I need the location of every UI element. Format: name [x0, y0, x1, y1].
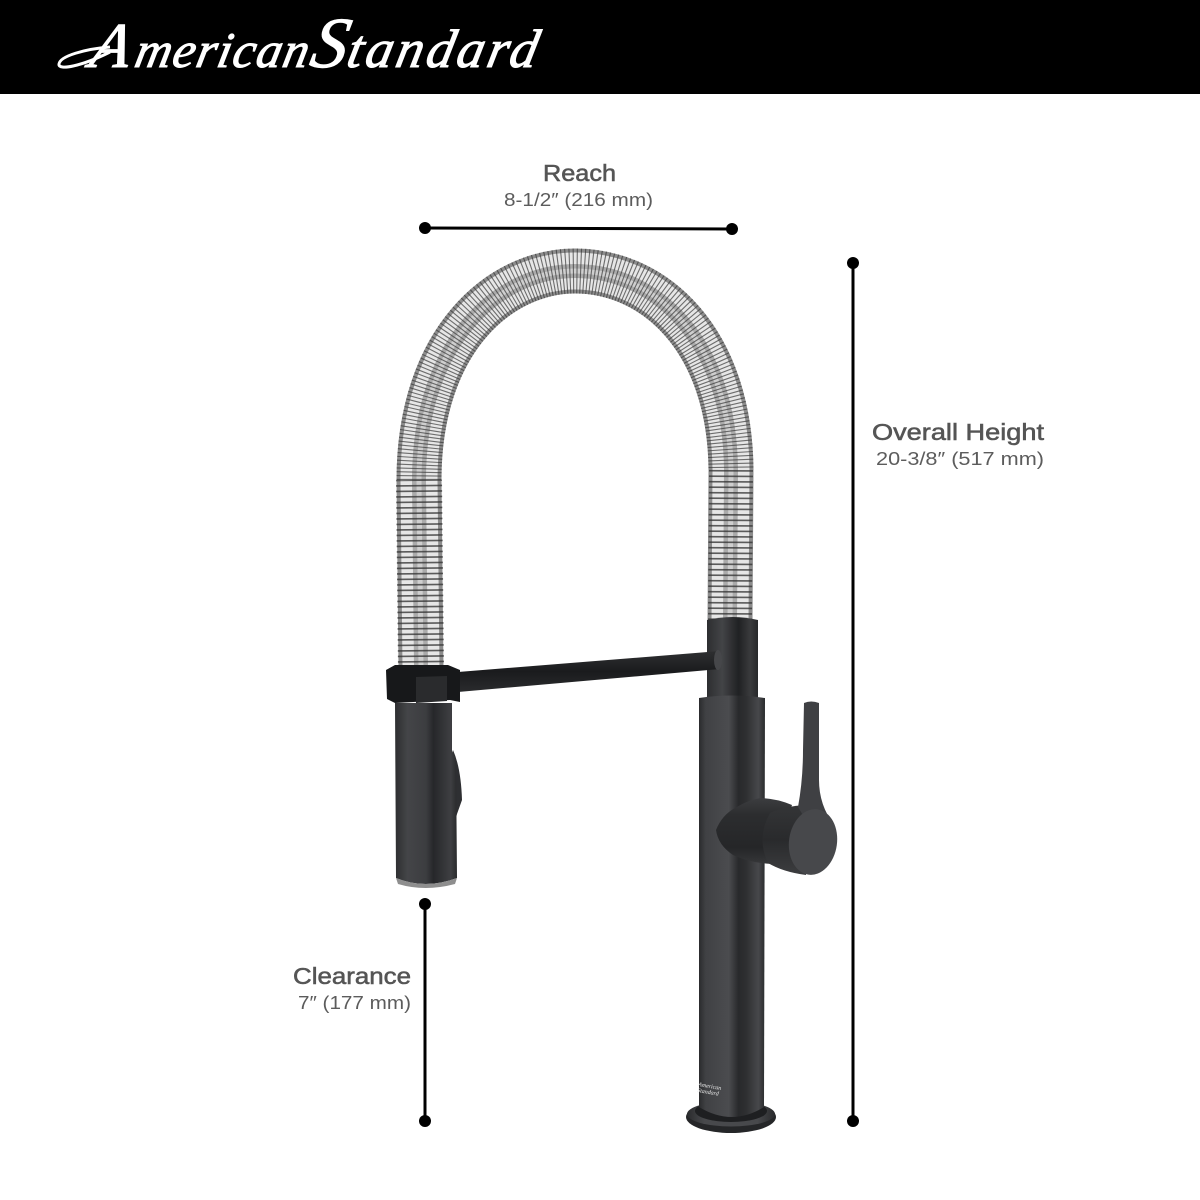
clearance heading: Clearance — [293, 963, 411, 989]
faucet illustration — [386, 271, 841, 1133]
reach dimension — [419, 160, 738, 235]
spray head nozzle — [396, 878, 457, 888]
clearance value: 7″ (177 mm) — [298, 993, 411, 1013]
overall height line — [847, 257, 859, 1127]
logo wordmark: S — [305, 3, 358, 83]
small body logo: American — [697, 1082, 722, 1092]
handle ring — [762, 805, 806, 875]
logo flourish — [59, 47, 110, 67]
upper collar — [707, 617, 758, 702]
main body column — [699, 696, 765, 1117]
clearance dimension — [293, 898, 431, 1127]
spray head trigger — [453, 750, 462, 830]
pull-down bar — [458, 651, 720, 692]
clearance line — [419, 898, 431, 1127]
reach value: 8-1/2″ (216 mm) — [504, 190, 653, 210]
spray head collar — [386, 665, 460, 703]
logo wordmark: tandard — [342, 19, 548, 79]
overall height dimension — [847, 257, 1045, 1127]
reach heading: Reach — [543, 160, 616, 186]
handle hub — [716, 798, 792, 864]
logo wordmark: A — [81, 10, 140, 81]
base plate — [686, 1100, 776, 1133]
header band with brand logo — [0, 0, 1200, 94]
overall height heading: Overall Height — [872, 419, 1045, 445]
small body logo: Standard — [697, 1088, 720, 1098]
flexible coil hose — [419, 271, 731, 668]
logo wordmark: merican — [131, 22, 317, 78]
spray head — [395, 703, 457, 884]
handle cap and lever — [785, 702, 841, 878]
overall height value: 20-3/8″ (517 mm) — [876, 449, 1044, 469]
bar socket — [714, 650, 722, 670]
reach line — [419, 222, 738, 235]
